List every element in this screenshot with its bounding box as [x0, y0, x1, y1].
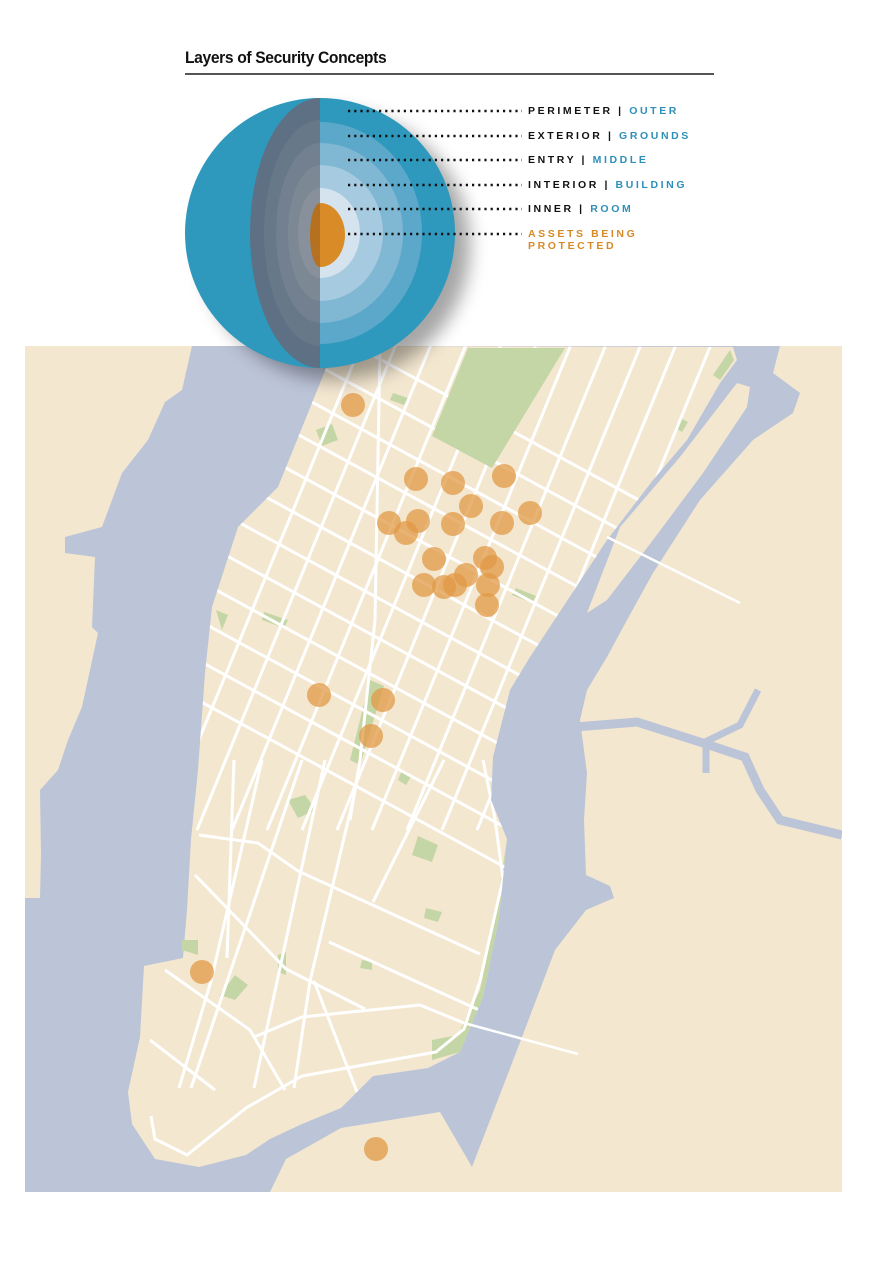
park: Central Park — [432, 348, 565, 468]
dots: protected sites — [190, 393, 542, 1161]
legend labels: EXTERIOR | GROUNDS — [528, 130, 691, 142]
legend labels: ASSETS BEING — [528, 228, 637, 240]
legend labels: ENTRY | MIDDLE — [528, 154, 648, 166]
land: Roosevelt Island — [587, 383, 750, 613]
land: New Jersey — [25, 346, 192, 898]
legend labels: INTERIOR | BUILDING — [528, 179, 687, 191]
river: Newtown Creek — [575, 722, 842, 835]
sphere diagram — [185, 98, 470, 380]
streets — [149, 346, 712, 1157]
legend labels: PROTECTED — [528, 240, 616, 252]
leader dots — [348, 111, 522, 234]
legend labels: PERIMETER | OUTER — [528, 105, 679, 117]
title: Layers of Security Concepts — [185, 48, 386, 67]
land: Manhattan — [128, 346, 737, 1167]
legend labels — [528, 105, 691, 252]
parks — [182, 350, 734, 1060]
street: Queensboro bridge — [607, 537, 740, 603]
land: Queens/Brooklyn — [270, 346, 842, 1192]
legend labels: INNER | ROOM — [528, 203, 633, 215]
